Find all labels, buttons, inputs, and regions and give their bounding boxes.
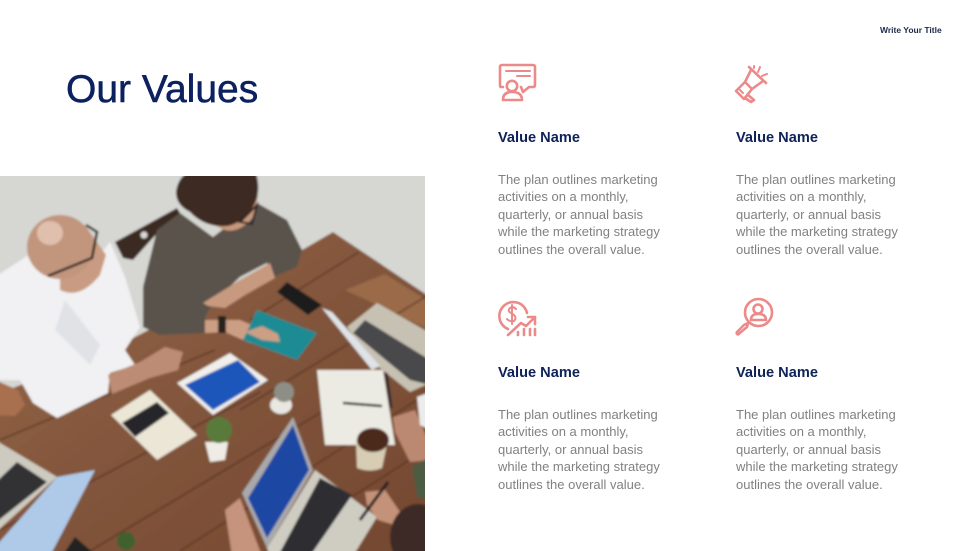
description (498, 407, 660, 492)
description (498, 172, 660, 257)
heading: Value Name (498, 365, 580, 381)
woman's head (215, 195, 258, 231)
laptop bottom left (0, 440, 57, 533)
heading: Value Name (736, 365, 818, 381)
photo: team working around a wooden table (0, 176, 425, 551)
icon: megaphone (734, 65, 768, 104)
description: The plan outlines marketing (736, 172, 896, 187)
hands and person at lower right (225, 498, 262, 551)
icon: magnifier over person (735, 298, 774, 336)
header label: Write Your Title (880, 25, 942, 35)
description: while the marketing strategy (498, 224, 660, 239)
paper notepad and pen (317, 370, 395, 445)
woman's arms and hands (203, 263, 275, 308)
description: quarterly, or annual basis (736, 207, 881, 222)
description: The plan outlines marketing (498, 407, 658, 422)
table items: phone, teal notebook (277, 282, 322, 315)
description: outlines the overall value. (498, 242, 645, 257)
description: The plan outlines marketing (498, 172, 658, 187)
description: while the marketing strategy (498, 459, 660, 474)
laptop bottom center (267, 470, 377, 551)
description: while the marketing strategy (736, 224, 898, 239)
description: while the marketing strategy (736, 459, 898, 474)
description: outlines the overall value. (736, 477, 883, 492)
description: activities on a monthly, (736, 189, 867, 204)
icon: dollar growth chart (498, 300, 536, 336)
man's head and glasses (60, 225, 106, 293)
woman's shirt (143, 203, 302, 335)
card: value 2 (734, 65, 898, 257)
bottom plant and dark object (62, 537, 97, 551)
description (736, 172, 898, 257)
description: quarterly, or annual basis (498, 207, 643, 222)
chair (115, 208, 180, 260)
description: quarterly, or annual basis (736, 442, 881, 457)
man's shirt (0, 242, 140, 418)
card: value 4 (735, 298, 898, 492)
card: value 1 (498, 64, 660, 257)
title: Our Values (66, 68, 258, 111)
description: quarterly, or annual basis (498, 442, 643, 457)
description: outlines the overall value. (736, 242, 883, 257)
plants (205, 442, 228, 462)
heading: Value Name (498, 130, 580, 146)
description: outlines the overall value. (498, 477, 645, 492)
heading: Value Name (736, 130, 818, 146)
icon: presenter with speech bubble (498, 64, 536, 102)
description (736, 407, 898, 492)
coffee cup (356, 440, 388, 470)
description: activities on a monthly, (498, 189, 629, 204)
card: value 3 (498, 300, 660, 492)
white notebook with phone (111, 390, 197, 460)
description: activities on a monthly, (498, 424, 629, 439)
description: activities on a monthly, (736, 424, 867, 439)
laptop upper right (347, 303, 430, 392)
description: The plan outlines marketing (736, 407, 896, 422)
tablet (177, 353, 268, 415)
man's hand and forearm (108, 347, 183, 394)
